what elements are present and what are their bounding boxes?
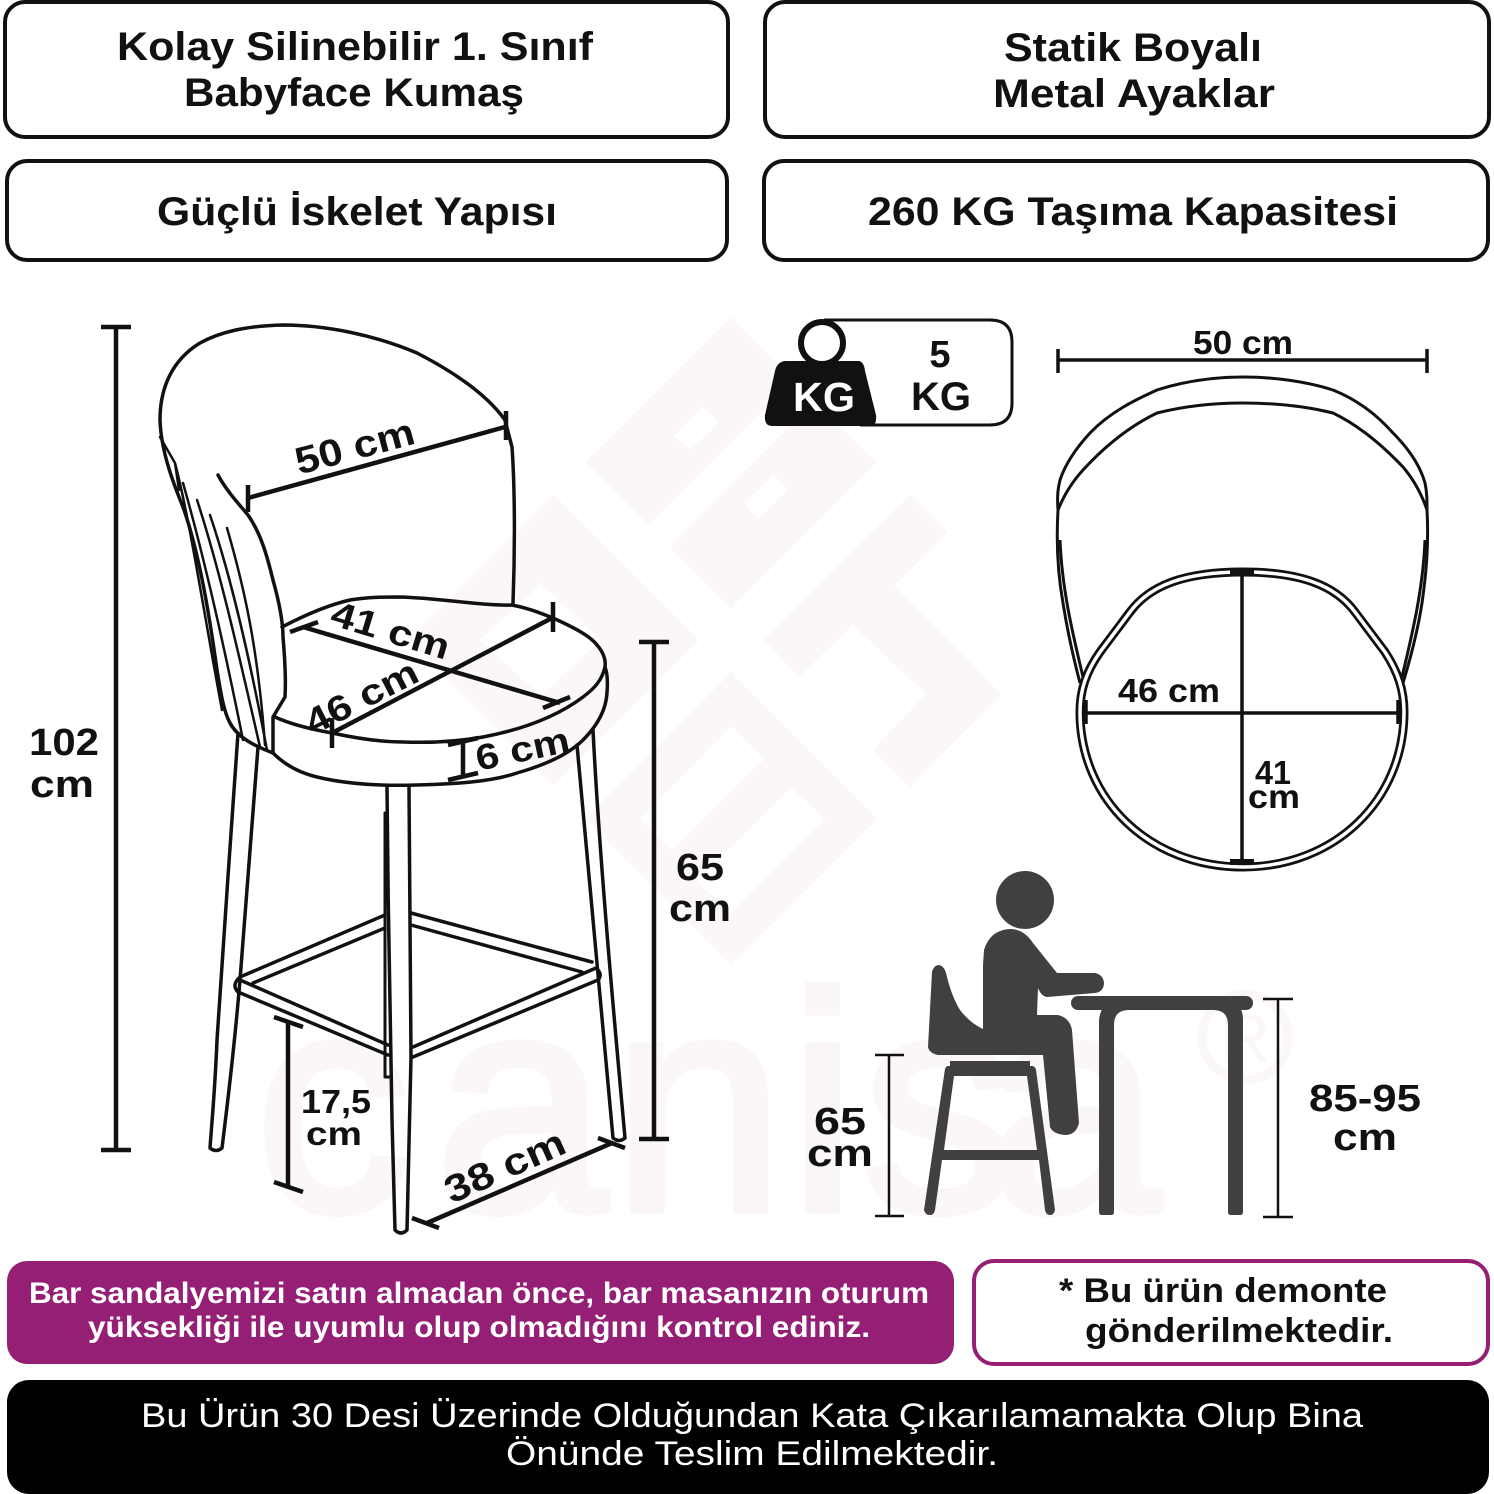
height labels [807, 1078, 1421, 1175]
box: fabric feature: Kolay Silinebilir 1. Sınıf [117, 25, 594, 69]
purple notice [7, 1261, 954, 1364]
top view seat outline [1080, 572, 1404, 867]
height labels: 85-95 [1309, 1078, 1421, 1120]
chair labels: 50 cm [291, 411, 419, 483]
top view labels: 50 cm [1193, 324, 1293, 361]
chair drawing [160, 325, 625, 1233]
black delivery banner [7, 1380, 1489, 1494]
purple notice: yüksekliği ile uyumlu olup olmadığını kontrol ediniz. [88, 1311, 870, 1344]
watermark logo: R [1220, 999, 1270, 1077]
top view labels: 41 [1255, 754, 1291, 791]
chair labels: 102 [29, 722, 99, 764]
weight badge: KG [793, 374, 855, 420]
chair labels: 38 cm [438, 1122, 572, 1212]
chair labels: cm [306, 1115, 362, 1152]
top view labels [1118, 324, 1300, 815]
weight badge: KG [911, 375, 971, 419]
seated person at bar table icon [924, 871, 1253, 1215]
height dimensions [875, 998, 1293, 1217]
box: metal legs feature: Statik Boyalı [1004, 26, 1262, 70]
box: strong frame feature [7, 161, 727, 260]
box: strong frame feature: Güçlü İskelet Yapısı [157, 190, 557, 234]
chair labels: cm [669, 888, 731, 930]
chair labels: 46 cm [298, 651, 425, 743]
chair labels: 41 cm [326, 593, 455, 667]
box: capacity feature [764, 161, 1488, 260]
height labels: cm [807, 1133, 873, 1175]
box: metal legs feature [765, 2, 1489, 137]
legs [210, 733, 258, 1150]
chair labels: 65 [676, 847, 724, 889]
demonte notice: * Bu ürün demonte [1059, 1272, 1387, 1310]
height labels: 65 [814, 1101, 866, 1143]
weight badge: 5 [929, 334, 951, 376]
demonte notice [974, 1261, 1488, 1364]
watermark logo: canisa [255, 929, 1162, 1276]
box: fabric feature: Babyface Kumaş [184, 71, 524, 115]
top view labels: 46 cm [1118, 672, 1220, 709]
weight badge [765, 320, 1012, 426]
chair labels: 17,5 [301, 1083, 371, 1120]
top view drawing [1057, 377, 1428, 683]
purple notice: Bar sandalyemizi satın almadan önce, bar masanızın oturum [29, 1277, 929, 1310]
black delivery banner: Bu Ürün 30 Desi Üzerinde Olduğundan Kata Çıkarılamamakta Olup Bina [141, 1397, 1363, 1435]
top view labels: cm [1248, 778, 1300, 815]
top view dimensions [1058, 349, 1427, 863]
demonte notice: gönderilmektedir. [1085, 1312, 1393, 1350]
box: fabric feature [5, 2, 728, 137]
watermark logo [255, 317, 1288, 1276]
chair labels [29, 411, 731, 1212]
box: metal legs feature: Metal Ayaklar [993, 72, 1275, 116]
chair labels: cm [30, 764, 94, 806]
height labels: cm [1333, 1117, 1397, 1159]
dimension lines: chair [101, 326, 669, 1228]
black delivery banner: Önünde Teslim Edilmektedir. [506, 1435, 998, 1473]
chair labels: 6 cm [472, 719, 573, 779]
box: capacity feature: 260 KG Taşıma Kapasitesi [868, 190, 1398, 234]
